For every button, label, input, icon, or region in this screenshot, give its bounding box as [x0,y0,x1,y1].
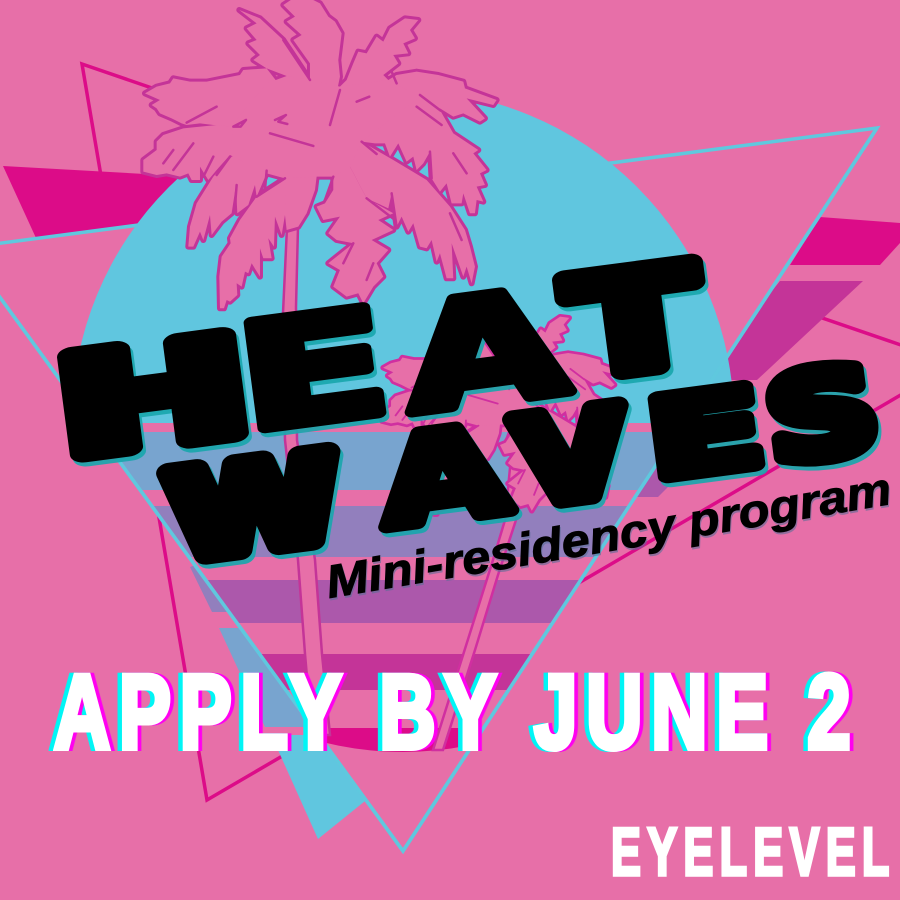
stripe fragments outside the triangle [190,217,900,727]
large triangle: pink fill with light blue outline [0,128,877,851]
title: WAVES: V [509,383,634,533]
title: HEAT: A [394,258,575,447]
small palm tree [382,303,623,750]
large palm tree [143,0,497,735]
title: WAVES [162,341,886,587]
left magenta parallelogram [3,166,180,238]
headline: apply by date: APPLY BY JUNE 2 [54,654,859,771]
title: WAVES: A [371,399,515,556]
lower blue triangle [278,735,370,839]
triangle lower edges over the stripes [0,128,877,851]
title: HEAT: T [560,236,708,409]
logo: EYELEVEL: EYELEVEL [611,814,896,890]
title: HEAT: H [48,307,259,488]
title: WAVES: E [640,364,770,504]
title: HEAT: E [228,276,399,465]
title: WAVES: S [759,341,886,491]
title: WAVES: W [162,429,347,587]
sun: striped circle [80,104,733,752]
subtitle: Mini-residency program: Mini-residency program [322,462,895,608]
title: HEAT [48,236,708,488]
background triangle outline: magenta [82,64,900,800]
